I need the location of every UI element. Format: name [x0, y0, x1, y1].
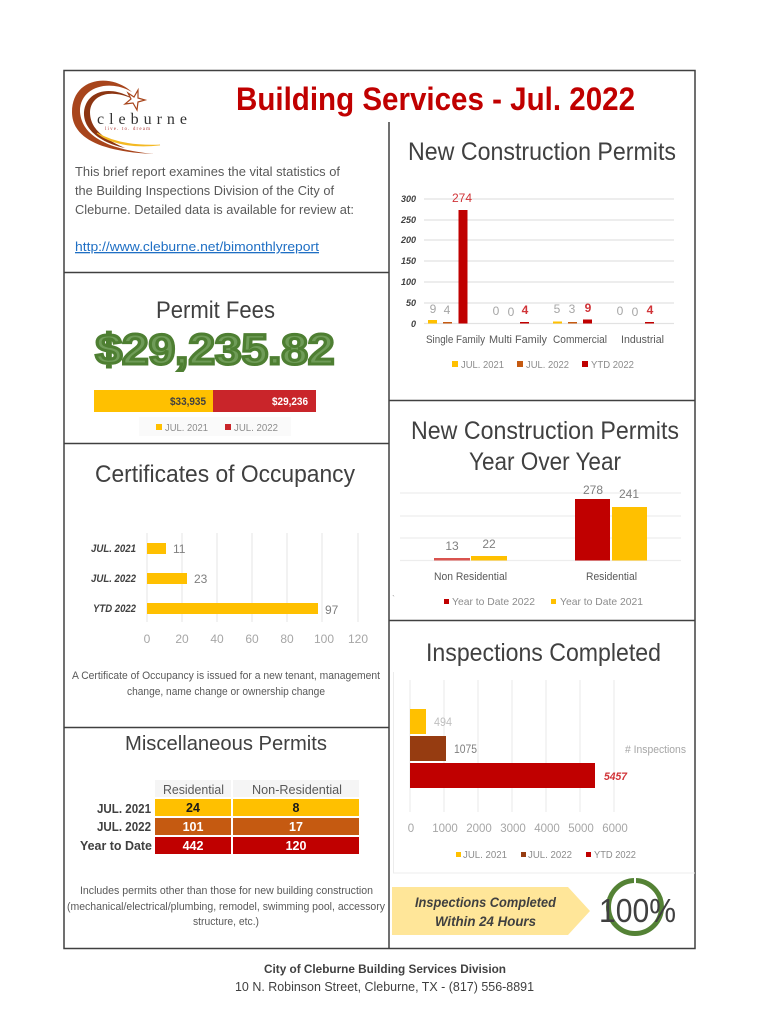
bar chart: inspections: 0	[408, 823, 414, 835]
bar chart: certificates: JUL. 2022	[91, 573, 136, 585]
table: miscellaneous permits: 17	[289, 820, 303, 834]
bar chart: new construction permits: 0	[508, 305, 515, 319]
bar chart: new construction permits: 9	[585, 301, 592, 315]
bar chart: inspections: 5457	[604, 771, 628, 783]
bar chart: certificates: JUL. 2021	[91, 543, 136, 555]
bar chart: new construction permits: Multi Family	[489, 334, 547, 346]
bar chart: year over year: 13	[445, 539, 459, 553]
table: miscellaneous permits: JUL. 2022	[97, 820, 151, 834]
bar chart: inspections: 1075	[454, 744, 477, 756]
bar chart: new construction permits: 50	[406, 298, 416, 308]
bar chart: year over year: 22	[482, 537, 496, 551]
heading: miscellaneous: Miscellaneous Permits	[125, 733, 327, 755]
bar chart: year over year: Residential	[586, 571, 637, 583]
bar chart: new construction permits: 200	[400, 235, 416, 245]
bar chart: inspections: 5000	[568, 823, 594, 835]
table: miscellaneous permits: Residential	[163, 783, 224, 797]
bar chart: new construction permits: Single Family	[426, 334, 485, 346]
bar chart: new construction permits: 4	[444, 303, 451, 317]
bar chart: new construction permits: 4	[647, 303, 654, 317]
footer: 10 N. Robinson Street, Cleburne, TX - (817) 556-8891	[235, 979, 534, 994]
legend	[452, 359, 634, 371]
legend: YTD 2022	[591, 359, 634, 371]
caption: miscellaneous: (mechanical/electrical/plumbing, remodel, swimming pool, accessory	[67, 901, 385, 913]
table: miscellaneous permits: 24	[186, 801, 200, 815]
legend: JUL. 2021	[165, 422, 208, 434]
bar chart: new construction permits	[400, 191, 674, 371]
bar chart: certificates: 11	[173, 542, 186, 556]
caption: certificates: A Certificate of Occupancy is issued for a new tenant, management	[72, 670, 380, 682]
bar chart: new construction permits: 0	[411, 319, 416, 329]
bar chart: new construction permits: 0	[617, 304, 624, 318]
bar chart: inspections: 3000	[500, 823, 526, 835]
caption: certificates	[72, 670, 380, 698]
legend: JUL. 2022	[234, 422, 278, 434]
bar chart: certificates: 97	[325, 603, 339, 617]
title: Building Services - Jul. 2022	[236, 81, 635, 117]
panel: new construction year over year	[392, 417, 681, 608]
legend: Year to Date 2021	[560, 596, 643, 608]
intro text block: This brief report examines the vital statistics of	[75, 164, 340, 179]
bar chart: inspections: 4000	[534, 823, 560, 835]
table: miscellaneous permits: 442	[183, 839, 203, 853]
bar chart: inspections	[394, 672, 695, 873]
big number: permit fee total: $29,235.82	[96, 326, 334, 374]
bar chart: year over year	[392, 483, 681, 608]
panel: permit fees	[94, 297, 334, 436]
heading: year over year: Year Over Year	[469, 448, 621, 476]
bar chart: year over year: `	[392, 594, 395, 604]
bar chart: certificates: 120	[348, 632, 368, 646]
arrow callout: within 24 hours: Within 24 Hours	[435, 914, 536, 929]
bar chart: certificates: 23	[194, 572, 208, 586]
table: miscellaneous permits: 8	[293, 801, 300, 815]
legend: JUL. 2022	[528, 849, 572, 861]
stacked bar: $29,236	[272, 396, 308, 408]
legend	[139, 417, 291, 436]
bar chart: certificates: 0	[144, 632, 151, 646]
bar chart: certificates: 60	[245, 632, 259, 646]
caption: miscellaneous: structure, etc.)	[193, 916, 259, 928]
donut gauge: 100 percent: 100%	[599, 892, 676, 929]
bar chart: certificates: 20	[175, 632, 189, 646]
bar chart: certificates: 100	[314, 632, 334, 646]
panel: certificates of occupancy	[72, 461, 380, 698]
arrow callout: within 24 hours: Inspections Completed	[415, 895, 557, 910]
bar chart: new construction permits: 150	[401, 256, 416, 266]
bar chart: new construction permits: 9	[430, 302, 437, 316]
caption: miscellaneous	[67, 885, 385, 928]
legend: JUL. 2022	[526, 359, 569, 371]
bar chart: year over year: 241	[619, 487, 639, 501]
heading: year over year: New Construction Permits	[411, 417, 679, 445]
caption: certificates: change, name change or ownership change	[127, 686, 325, 698]
heading: inspections: Inspections Completed	[426, 639, 661, 667]
footer: City of Cleburne Building Services Division	[264, 962, 506, 976]
intro text block	[75, 164, 354, 254]
bar chart: inspections: 2000	[466, 823, 492, 835]
arrow callout: within 24 hours	[392, 887, 590, 935]
table: miscellaneous permits: JUL. 2021	[97, 802, 151, 816]
bar chart: new construction permits: 5	[554, 302, 561, 316]
logo: City of Cleburne	[72, 81, 187, 154]
table: miscellaneous permits: 101	[183, 820, 203, 834]
intro text block: Cleburne. Detailed data is available for review at:	[75, 202, 354, 217]
table: miscellaneous permits: 120	[286, 839, 306, 853]
heading: certificates: Certificates of Occupancy	[95, 461, 355, 488]
bar chart: new construction permits: 274	[452, 191, 472, 205]
bar chart: year over year: 278	[583, 483, 603, 497]
panel: inspections completed	[392, 639, 695, 935]
bar chart: certificates: YTD 2022	[93, 603, 136, 615]
table: miscellaneous permits: Year to Date	[80, 839, 152, 853]
bar chart: inspections: 1000	[432, 823, 458, 835]
bar chart: new construction permits: Industrial	[621, 334, 664, 346]
bar chart: certificates	[91, 533, 368, 646]
bar chart: new construction permits: 3	[569, 302, 576, 316]
bar chart: new construction permits: Commercial	[553, 334, 607, 346]
logo: City of Cleburne: cleburne	[97, 111, 187, 128]
bar chart: new construction permits: 300	[401, 194, 416, 204]
table: miscellaneous permits: Non-Residential	[252, 783, 342, 797]
bar chart: year over year: Non Residential	[434, 571, 507, 583]
bar chart: new construction permits: 250	[400, 215, 416, 225]
heading: year over year	[411, 417, 679, 476]
legend	[456, 849, 636, 861]
bar chart: new construction permits: 4	[522, 303, 529, 317]
intro text block: http://www.cleburne.net/bimonthlyreport	[75, 239, 319, 254]
legend: JUL. 2021	[463, 849, 507, 861]
bar chart: inspections: # Inspections	[625, 744, 686, 756]
bar chart: new construction permits: 100	[401, 277, 416, 287]
bar chart: inspections: 6000	[602, 823, 628, 835]
stacked bar: $33,935	[170, 396, 206, 408]
bar chart: certificates: 80	[280, 632, 294, 646]
footer	[235, 962, 534, 994]
table: miscellaneous permits	[80, 780, 359, 854]
heading: permit fees: Permit Fees	[156, 297, 275, 324]
donut gauge: 100 percent	[599, 876, 676, 934]
legend: JUL. 2021	[461, 359, 504, 371]
logo: City of Cleburne: live. to. dream	[105, 127, 150, 132]
panel: miscellaneous permits	[67, 733, 385, 928]
bar chart: certificates: 40	[210, 632, 224, 646]
heading: new construction permits: New Construction Permits	[408, 138, 676, 166]
stacked bar	[94, 390, 316, 412]
bar chart: new construction permits: 0	[632, 305, 639, 319]
legend	[444, 596, 643, 608]
panel: new construction permits	[400, 138, 676, 371]
legend: Year to Date 2022	[452, 596, 535, 608]
caption: miscellaneous: Includes permits other than those for new building construction	[80, 885, 373, 897]
legend: YTD 2022	[594, 849, 636, 861]
bar chart: new construction permits: 0	[493, 304, 500, 318]
intro text block: the Building Inspections Division of the City of	[75, 183, 334, 198]
bar chart: inspections: 494	[434, 717, 453, 729]
